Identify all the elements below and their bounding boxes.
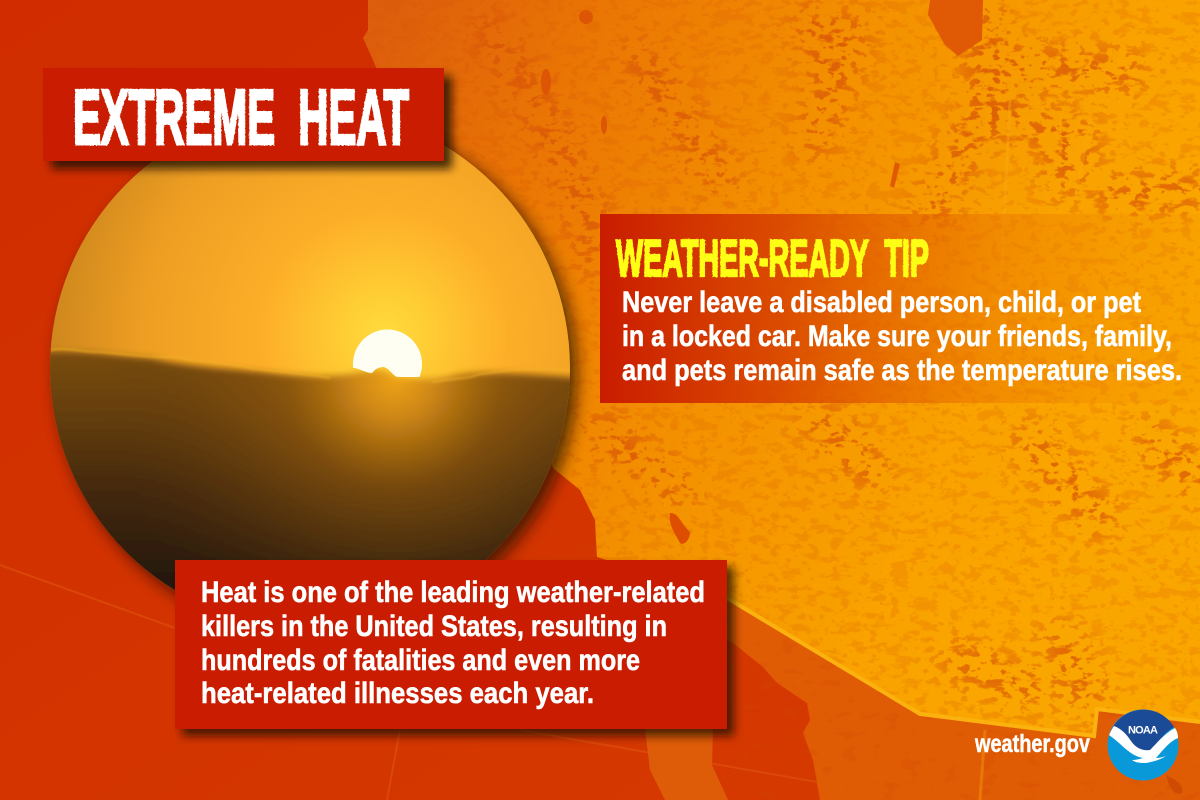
fact text: Heat is one of the leading weather-related (201, 576, 705, 609)
background: Mexico mainland (727, 598, 1200, 800)
background: Baja peninsula (645, 729, 728, 800)
horizon clouds and ground (50, 348, 570, 590)
sun (353, 330, 422, 377)
icon: NOAA logo: NOAA (1128, 724, 1158, 736)
background: US terrain map (340, 0, 1200, 760)
background: graticule lines (0, 565, 920, 800)
border line (727, 598, 1200, 736)
title: EXTREME HEAT (73, 73, 409, 161)
title banner (43, 68, 452, 169)
website label: weather.gov (974, 730, 1090, 758)
tip heading: WEATHER-READY TIP (616, 230, 929, 288)
sun photo circle (45, 140, 590, 607)
fact text: hundreds of fatalities and even more (201, 644, 640, 677)
tip text (622, 286, 1182, 387)
icon: NOAA logo (1108, 710, 1178, 780)
fact text (201, 576, 705, 710)
fact text: heat-related illnesses each year. (201, 677, 594, 710)
panel: weather-ready tip (600, 214, 1200, 403)
fact text: killers in the United States, resulting in (201, 610, 667, 643)
panel: heat fact (175, 560, 734, 736)
